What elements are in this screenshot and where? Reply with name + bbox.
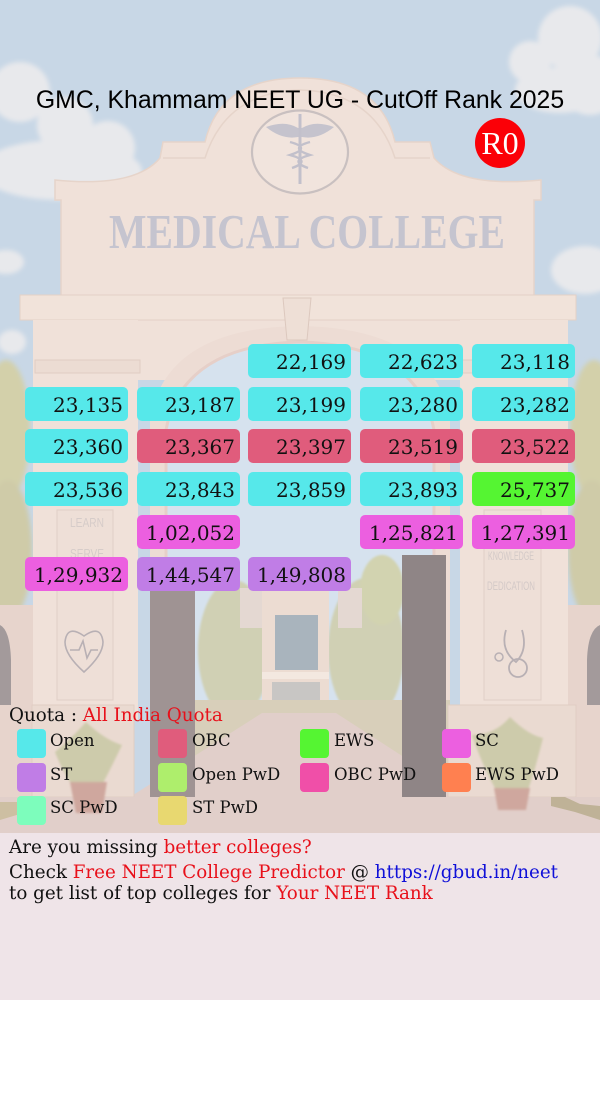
potted plants [55, 717, 543, 813]
distant trees [198, 555, 404, 722]
row 2 cells [25, 387, 575, 421]
row 6 cells: 1,49,808 [257, 563, 346, 587]
legend: Open PwD [192, 765, 280, 784]
row 5 cells [137, 515, 575, 549]
right pillar [460, 320, 568, 720]
row 5 cells: 1,27,391 [481, 521, 570, 545]
row 3 cells: 23,397 [276, 435, 346, 459]
round badge [475, 118, 525, 168]
legend: EWS [300, 729, 329, 758]
legend: EWS PwD [442, 763, 471, 792]
legend: OBC [158, 729, 187, 758]
row 1 cells: 22,169 [276, 350, 346, 374]
row 4 cells: 23,859 [276, 478, 346, 502]
legend: OBC PwD [334, 765, 416, 784]
row 1 cells: 22,623 [388, 350, 458, 374]
heart icon [65, 631, 103, 672]
engraved name: MEDICAL COLLEGE [109, 204, 505, 259]
side trees [0, 360, 600, 620]
gates [150, 590, 195, 797]
background illustration: medical college gate: SERVE [70, 546, 104, 561]
legend: OBC PwD [300, 763, 329, 792]
row 2 cells: 23,280 [388, 393, 458, 417]
row 4 cells: 23,893 [388, 478, 458, 502]
lawn and road [150, 700, 450, 800]
row 6 cells: 1,44,547 [146, 563, 235, 587]
legend: EWS PwD [475, 765, 559, 784]
cutoff rank grid [25, 344, 575, 591]
round badge: R0 [481, 125, 519, 161]
row 3 cells: 23,360 [53, 435, 123, 459]
pillar engravings: LEARN [70, 515, 104, 530]
cornice [20, 295, 576, 320]
quota heading: Quota : All India Quota [9, 705, 223, 726]
row 3 cells: 23,519 [388, 435, 458, 459]
row 3 cells: 23,522 [500, 435, 570, 459]
row 6 cells [25, 557, 351, 591]
legend: SC PwD [50, 798, 118, 817]
legend: OBC [192, 731, 231, 750]
row 5 cells: 1,02,052 [146, 521, 235, 545]
plinths [32, 705, 134, 797]
legend: ST PwD [192, 798, 258, 817]
row 5 cells: 1,25,821 [369, 521, 458, 545]
promo line 1: Are you missing better colleges? [9, 837, 312, 858]
row 4 cells: 23,843 [165, 478, 235, 502]
legend: ST [17, 763, 46, 792]
caduceus medallion [252, 110, 348, 194]
legend [17, 729, 559, 825]
row 2 cells: 23,199 [276, 393, 346, 417]
pediment [55, 78, 541, 296]
side walls [0, 605, 34, 805]
kerb stripes [551, 797, 600, 820]
legend: SC PwD [17, 796, 46, 825]
hospital building [240, 588, 262, 628]
row 4 cells [25, 472, 575, 506]
row 3 cells [25, 429, 575, 463]
legend: SC [442, 729, 471, 758]
row 2 cells: 23,282 [500, 393, 570, 417]
promo line 2: Check Free NEET College Predictor @ https://gbud.in/neet [9, 862, 558, 883]
row 2 cells: 23,135 [53, 393, 123, 417]
left pillar [33, 320, 138, 720]
legend: Open [17, 729, 46, 758]
promo line 3: to get list of top colleges for Your NEET Rank [9, 883, 433, 904]
legend: SC [475, 731, 499, 750]
legend: Open [50, 731, 94, 750]
row 6 cells: 1,29,932 [34, 563, 123, 587]
legend: ST PwD [158, 796, 187, 825]
row 4 cells: 23,536 [53, 478, 123, 502]
row 3 cells: 23,367 [165, 435, 235, 459]
legend: EWS [334, 731, 374, 750]
arch opening [62, 320, 534, 380]
legend: Open PwD [158, 763, 187, 792]
stethoscope icon [504, 630, 524, 662]
title: GMC, Khammam NEET UG - CutOff Rank 2025 [36, 87, 564, 114]
bottom promo panel background [0, 833, 600, 1000]
row 4 cells: 25,737 [500, 478, 570, 502]
row 1 cells [248, 344, 575, 378]
legend: ST [50, 765, 72, 784]
background illustration: medical college gate: KNOWLEDGE [488, 549, 534, 563]
row 1 cells: 23,118 [500, 350, 570, 374]
row 2 cells: 23,187 [165, 393, 235, 417]
background illustration: medical college gate: DEDICATION [487, 579, 535, 593]
